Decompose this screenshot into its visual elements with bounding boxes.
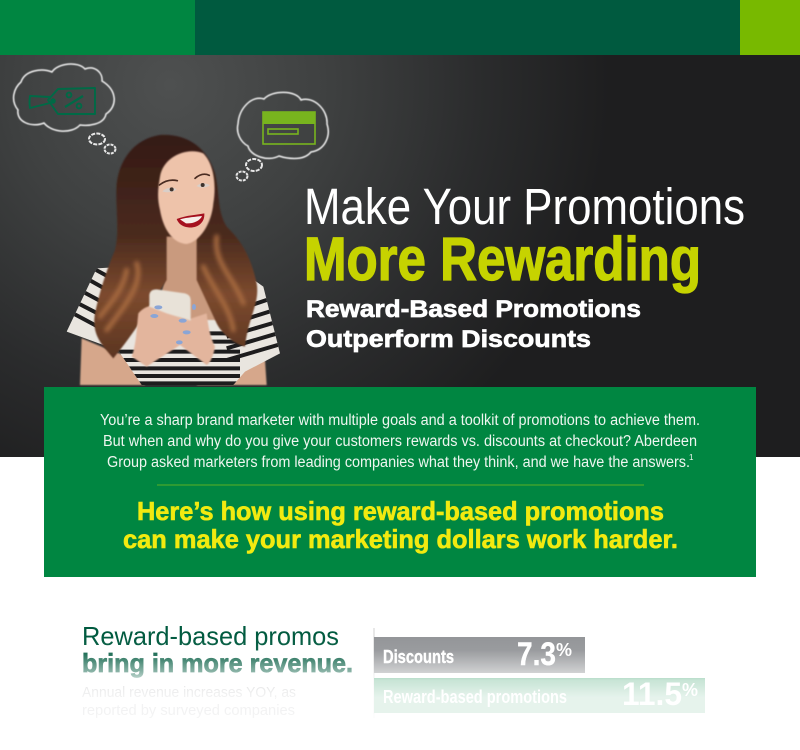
subtitle <box>306 296 641 353</box>
fingernails <box>150 304 196 344</box>
description: reported by surveyed companies <box>82 702 295 719</box>
intro paragraph: You’re a sharp brand marketer with multiple goals and a toolkit of promotions to achieve them. <box>100 412 700 429</box>
icon: percent tag <box>30 88 95 114</box>
face <box>158 151 215 244</box>
icon: thought bubble with discount tag <box>14 64 115 154</box>
subtitle: Reward-Based Promotions <box>306 296 641 323</box>
icon: thought bubble with credit card <box>236 92 328 180</box>
hands <box>132 305 215 367</box>
bar: discounts: % <box>556 640 572 660</box>
panel: green introduction <box>44 387 756 577</box>
intro paragraph: But when and why do you give your customers rewards vs. discounts at checkout? Aberdeen <box>103 433 697 450</box>
callout heading: can make your marketing dollars work harder. <box>123 524 678 554</box>
white fade over bottom edge <box>0 635 800 750</box>
photo: woman holding a phone <box>63 135 283 387</box>
phone <box>149 289 191 321</box>
subtitle: Outperform Discounts <box>306 326 591 353</box>
description <box>82 684 296 719</box>
icon: credit card <box>263 112 315 144</box>
callout heading <box>123 496 678 554</box>
lips <box>177 213 204 227</box>
bar: discounts <box>374 636 585 673</box>
striped shirt <box>63 263 283 387</box>
hero chalkboard background <box>0 55 800 457</box>
intro paragraph: Group asked marketers from leading companies what they think, and we have the answers. <box>107 454 690 471</box>
hair highlights <box>100 237 243 330</box>
bar chart <box>374 628 705 718</box>
arms <box>80 338 267 385</box>
title: more rewarding: More Rewarding <box>304 225 701 293</box>
bar: reward-based promotions <box>374 676 705 713</box>
heading: revenue <box>82 621 353 678</box>
bar: discounts: 7.3 <box>517 636 556 672</box>
heading: revenue: Reward-based promos <box>82 621 339 651</box>
callout heading: Here’s how using reward-based promotions <box>137 496 664 526</box>
top colour band <box>0 0 800 55</box>
eyes and brows <box>159 174 209 185</box>
description: Annual revenue increases YOY, as <box>82 684 296 701</box>
neck and chest <box>153 233 220 320</box>
intro paragraph <box>100 412 700 471</box>
bar: reward-based promotions: 11.5 <box>622 676 682 712</box>
bar: discounts: Discounts <box>383 647 454 667</box>
bar: reward-based promotions: % <box>682 680 698 700</box>
heading: revenue: bring in more revenue. <box>82 648 353 678</box>
bar: reward-based promotions: Reward-based promotions <box>383 687 567 707</box>
divider <box>157 484 644 486</box>
hair <box>94 135 257 358</box>
intro paragraph: 1 <box>689 453 694 462</box>
